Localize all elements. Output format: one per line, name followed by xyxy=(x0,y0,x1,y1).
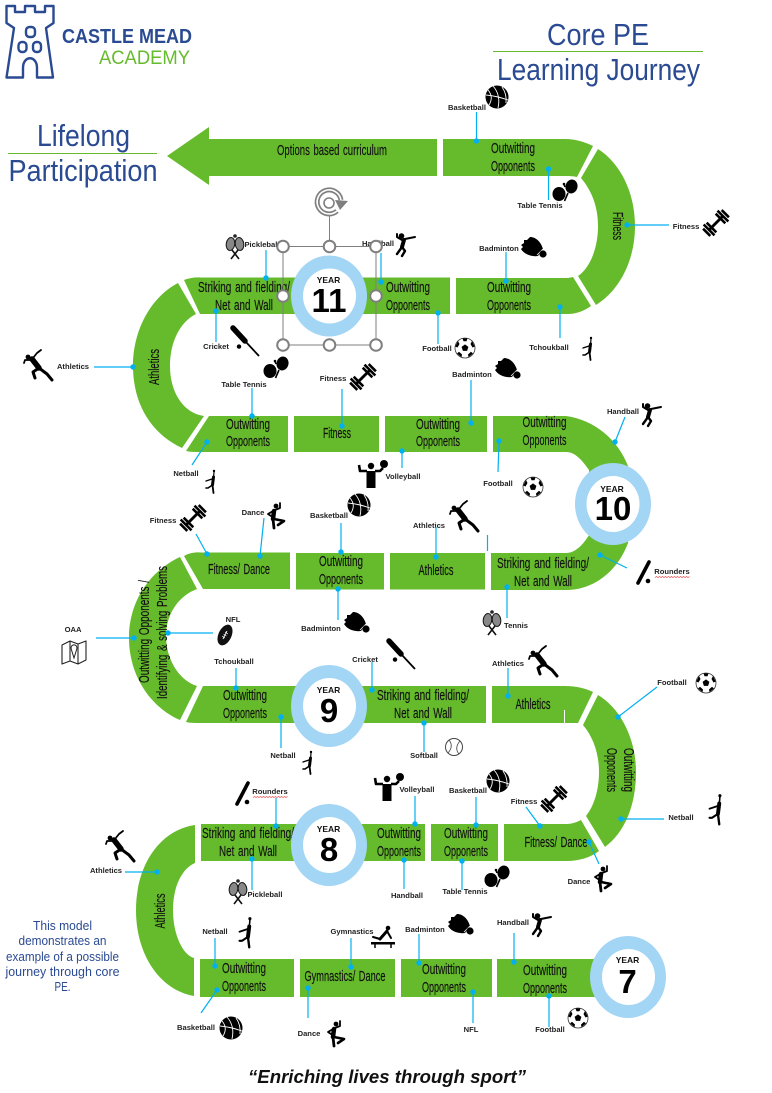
callout: Netball right: Netball xyxy=(668,813,694,822)
segment labels: curriculum text on the road: Outwitting Opponents / xyxy=(136,579,153,683)
callout: NFL Y9: NFL xyxy=(226,615,241,624)
segment labels: curriculum text on the road xyxy=(136,140,637,997)
callout: Cricket Y11 xyxy=(203,308,259,356)
callout: Gymnastics Y7: Gymnastics xyxy=(330,927,374,936)
callout: Tchoukball Y9: Tchoukball xyxy=(214,657,254,666)
segment labels: curriculum text on the road: Athletics xyxy=(516,696,550,713)
segment labels: curriculum text on the road: Opponents xyxy=(523,980,567,997)
tagline: “Enriching lives through sport” xyxy=(248,1066,527,1087)
segment labels: curriculum text on the road: Opponents xyxy=(319,571,363,588)
callout: Athletics Y11: Athletics xyxy=(57,362,89,371)
segment labels: curriculum text on the road: Opponents xyxy=(386,297,430,314)
callout: Fitness Y11: Fitness xyxy=(320,374,346,383)
callout: Dance Y7 xyxy=(298,985,344,1046)
callout: Netball Y7: Netball xyxy=(202,927,228,936)
segment labels: curriculum text on the road: Opponents xyxy=(603,748,620,792)
badge: Year 11: YEAR xyxy=(317,275,340,285)
callout: Fitness Y11 xyxy=(320,361,379,429)
callout: Volleyball Y10: Volleyball xyxy=(386,472,420,481)
text block: model note: example of a possible xyxy=(6,950,119,964)
selection frame around Year 11 xyxy=(277,190,382,351)
segment labels: curriculum text on the road: Opponents xyxy=(226,433,270,450)
callout: Basketball Y11 top xyxy=(448,86,508,144)
callout: Table Tennis Y8 xyxy=(442,858,511,896)
segment labels: curriculum text on the road: Outwitting xyxy=(444,825,488,842)
callout: Volleyball Y8 xyxy=(375,773,434,827)
callout: Volleyball Y10 xyxy=(359,448,420,488)
badge: Year 9: YEAR xyxy=(317,685,340,695)
segment labels: curriculum text on the road: Net and Wall xyxy=(514,573,572,590)
segment labels: curriculum text on the road: Athletics xyxy=(146,349,163,385)
callout: Badminton Y7: Badminton xyxy=(405,925,445,934)
callout: Gymnastics Y7 xyxy=(330,926,395,970)
callout: Badminton Y10 xyxy=(452,358,521,426)
badge: Year 11: 11 xyxy=(312,282,346,319)
callout: Cricket Y11: Cricket xyxy=(203,342,229,351)
journey path: green road segments xyxy=(129,127,636,997)
logo wordmark xyxy=(62,26,192,69)
text block: model note: journey through core xyxy=(5,965,120,979)
badge: Year 8 xyxy=(291,804,367,886)
callout: Softball Y9: Softball xyxy=(410,751,438,760)
callout: Pickleball Y8 xyxy=(228,856,283,904)
title: Core PE Learning Journey: Core PE xyxy=(547,17,649,52)
callout: Tchoukball Y11 xyxy=(529,304,592,360)
badge: Year 7: 7 xyxy=(618,963,637,1000)
segment labels: curriculum text on the road: Outwitting xyxy=(491,140,535,157)
callout: Athletics Y10: Athletics xyxy=(413,521,445,530)
callout: NFL Y9 xyxy=(165,615,241,648)
callout: Athletics Y8: Athletics xyxy=(90,866,122,875)
badge: Year 11 xyxy=(291,256,367,336)
callout: Netball Y10: Netball xyxy=(173,469,199,478)
segment labels: curriculum text on the road: Opponents xyxy=(377,843,421,860)
icon: castle xyxy=(6,6,54,78)
callout: Basketball Y8: Basketball xyxy=(449,786,487,795)
heading: Lifelong Participation: Lifelong xyxy=(37,118,130,153)
callout: NFL Y7: NFL xyxy=(464,1025,479,1034)
callout: Volleyball Y8: Volleyball xyxy=(400,785,434,794)
callout: Athletics Y8 xyxy=(90,831,160,875)
callout: Badminton Y7 xyxy=(405,914,474,966)
callout: Badminton Y9 xyxy=(301,586,370,633)
icon: rotate handle xyxy=(317,190,348,214)
segment labels: curriculum text on the road: Outwitting xyxy=(422,961,466,978)
callout: Table Tennis top: Table Tennis xyxy=(517,201,563,210)
segment labels: curriculum text on the road: Striking and fielding/ xyxy=(377,687,470,704)
segment labels: curriculum text on the road: Opponents xyxy=(487,297,531,314)
title: Core PE Learning Journey xyxy=(493,17,703,87)
segment labels: curriculum text on the road: Striking and fielding/ xyxy=(497,555,590,572)
segment labels: curriculum text on the road: Options based curriculum xyxy=(277,142,387,159)
segment labels: curriculum text on the road: Fitness/ Dance xyxy=(208,561,270,578)
segment labels: curriculum text on the road: Net and Wall xyxy=(394,705,452,722)
segment labels: curriculum text on the road: Fitness/ Dance xyxy=(524,834,588,851)
logo: Castle Mead Academy xyxy=(6,6,192,78)
callout: Fitness Y8 xyxy=(511,783,570,829)
callout: Handball Y11 xyxy=(362,233,415,285)
callout: Table Tennis top xyxy=(517,166,579,210)
callout: Handball Y8 xyxy=(391,857,423,900)
segment labels: curriculum text on the road: Net and Wall xyxy=(215,297,273,314)
segment labels: curriculum text on the road: Outwitting xyxy=(222,960,266,977)
callout: Football Y7 xyxy=(535,993,588,1034)
segment labels: curriculum text on the road: Outwitting xyxy=(223,687,267,704)
callout: Tennis Y10 xyxy=(482,584,528,635)
callout: Football Y11 xyxy=(422,310,475,358)
badge: Year 7: YEAR xyxy=(616,955,639,965)
badge: Year 10: 10 xyxy=(595,490,631,527)
callout: Fitness right: Fitness xyxy=(673,222,699,231)
callout: OAA: OAA xyxy=(65,625,82,634)
callout: Netball right xyxy=(618,794,721,824)
text block: model note: demonstrates an xyxy=(18,934,107,948)
callout: Tchoukball Y11: Tchoukball xyxy=(529,343,569,352)
badge: Year 8: 8 xyxy=(320,831,338,868)
text block: model note xyxy=(5,919,120,994)
callout: Football Y10: Football xyxy=(483,479,513,488)
callout: Fitness Y9 xyxy=(150,502,210,557)
callout: Rounders Y8 xyxy=(237,783,288,829)
callout: Handball Y10 xyxy=(607,403,661,445)
callout: Rounders Y8: Rounders xyxy=(252,787,288,796)
callout: Dance Y7: Dance xyxy=(298,1029,320,1038)
badge: Year 8: YEAR xyxy=(317,824,340,834)
callout: Athletics Y9 xyxy=(492,646,557,699)
callout: Basketball Y9: Basketball xyxy=(310,511,348,520)
callout: Dance Y9 xyxy=(242,503,284,559)
segment labels: curriculum text on the road: Fitness xyxy=(323,425,351,442)
badge: Year 10: YEAR xyxy=(600,484,624,494)
callout: Badminton Y10: Badminton xyxy=(452,370,492,379)
segment labels: curriculum text on the road: Opponents xyxy=(223,705,267,722)
segment labels: curriculum text on the road: Identifying & solving Problems xyxy=(154,566,171,699)
callout: Pickleball Y11: Pickleball xyxy=(244,240,280,249)
segment labels: curriculum text on the road: Outwitting xyxy=(386,279,430,296)
callout: Pickleball Y8: Pickleball xyxy=(247,890,283,899)
callout: Football Y11: Football xyxy=(422,344,452,353)
segment labels: curriculum text on the road: Opponents xyxy=(444,843,488,860)
text block: model note: PE. xyxy=(54,980,70,994)
callout: Fitness right xyxy=(624,207,732,239)
callout: Dance Y8: Dance xyxy=(568,877,590,886)
callout: Handball Y11: Handball xyxy=(362,239,394,248)
callout: Basketball Y7: Basketball xyxy=(177,1023,215,1032)
callout: Netball Y7 xyxy=(202,917,251,969)
callout: Fitness Y9: Fitness xyxy=(150,516,176,525)
callout: Cricket Y9 xyxy=(352,641,415,693)
callout: Athletics Y9: Athletics xyxy=(492,659,524,668)
segment labels: curriculum text on the road: Net and Wall xyxy=(219,843,277,860)
callout: NFL Y7 xyxy=(464,989,479,1034)
segment labels: curriculum text on the road: Opponents xyxy=(222,978,266,995)
callout: Softball Y9 xyxy=(410,720,462,760)
segment labels: curriculum text on the road: Outwitting xyxy=(226,416,270,433)
segment labels: curriculum text on the road: Outwitting xyxy=(522,414,566,431)
callout: Football Y10 xyxy=(483,438,543,497)
callout: Tchoukball Y9 xyxy=(214,657,254,691)
segment labels: curriculum text on the road: Outwitting xyxy=(523,962,567,979)
callout: OAA xyxy=(62,625,137,664)
callout: Handball Y10: Handball xyxy=(607,407,639,416)
callout: Netball Y9 xyxy=(270,714,312,774)
segment labels: curriculum text on the road: Striking and fielding/ xyxy=(198,279,291,296)
segment labels: curriculum text on the road: Striking and fielding/ xyxy=(202,825,295,842)
segment labels: curriculum text on the road: Fitness xyxy=(609,212,626,240)
callout: Pickleball Y11 xyxy=(225,234,280,281)
title: Core PE Learning Journey: Learning Journey xyxy=(497,52,700,87)
callout: Table Tennis Y8: Table Tennis xyxy=(442,887,488,896)
callout: Football Y7: Football xyxy=(535,1025,565,1034)
callout: Athletics Y10 xyxy=(413,501,478,560)
heading: Lifelong Participation xyxy=(8,118,158,188)
callout: Football Y8 right xyxy=(615,673,716,720)
callout: Table Tennis Y11: Table Tennis xyxy=(221,380,267,389)
segment labels: curriculum text on the road: Athletics xyxy=(152,894,169,928)
segment labels: curriculum text on the road: Gymnastics/ Dance xyxy=(304,968,386,985)
callout: Table Tennis Y11 xyxy=(221,355,290,419)
callout: Basketball Y9 xyxy=(310,494,370,555)
segment labels: curriculum text on the road: Outwitting xyxy=(416,416,460,433)
callout: Badminton Y11: Badminton xyxy=(479,244,519,253)
callout: Rounders Y10: Rounders xyxy=(654,567,690,576)
callout: Cricket Y9: Cricket xyxy=(352,655,378,664)
callout: Basketball Y11 top: Basketball xyxy=(448,103,486,112)
segment labels: curriculum text on the road: Opponents xyxy=(422,979,466,996)
badge: Year 10 xyxy=(575,463,651,545)
heading: Lifelong Participation: Participation xyxy=(8,153,158,188)
badge: Year 9: 9 xyxy=(320,692,338,729)
callout: Handball Y7 xyxy=(497,913,551,965)
callout: Dance Y9: Dance xyxy=(242,508,264,517)
segment labels: curriculum text on the road: Opponents xyxy=(522,432,566,449)
segment labels: curriculum text on the road: Outwitting xyxy=(620,748,637,792)
text block: model note: This model xyxy=(33,919,92,933)
segment labels: curriculum text on the road: Opponents xyxy=(416,433,460,450)
logo wordmark: ACADEMY xyxy=(99,48,190,69)
callout: Handball Y8: Handball xyxy=(391,891,423,900)
segment labels: curriculum text on the road: Outwitting xyxy=(377,825,421,842)
segment labels: curriculum text on the road: Outwitting xyxy=(319,553,363,570)
callout: Basketball Y7 xyxy=(177,987,242,1040)
callout: Handball Y7: Handball xyxy=(497,918,529,927)
segment labels: curriculum text on the road: Athletics xyxy=(418,562,454,579)
callout: Netball Y9: Netball xyxy=(270,751,296,760)
callout: Basketball Y8 xyxy=(449,770,510,828)
logo wordmark: CASTLE MEAD xyxy=(62,26,192,48)
callout: Badminton Y11 xyxy=(479,237,547,284)
segment labels: curriculum text on the road: Outwitting xyxy=(487,279,531,296)
callout: Tennis Y10: Tennis xyxy=(504,621,528,630)
callout: Fitness Y8: Fitness xyxy=(511,797,537,806)
badge: Year 9 xyxy=(291,665,367,747)
callout: Rounders Y10 xyxy=(597,552,690,583)
callout: Athletics Y11 xyxy=(24,350,136,380)
callout: Football Y8 right: Football xyxy=(657,678,687,687)
callout: Dance Y8 xyxy=(568,839,611,891)
callout: Badminton Y9: Badminton xyxy=(301,624,341,633)
badge: Year 7 xyxy=(590,936,666,1018)
callout: Netball Y10 xyxy=(173,439,215,493)
segment labels: curriculum text on the road: Opponents xyxy=(491,158,535,175)
